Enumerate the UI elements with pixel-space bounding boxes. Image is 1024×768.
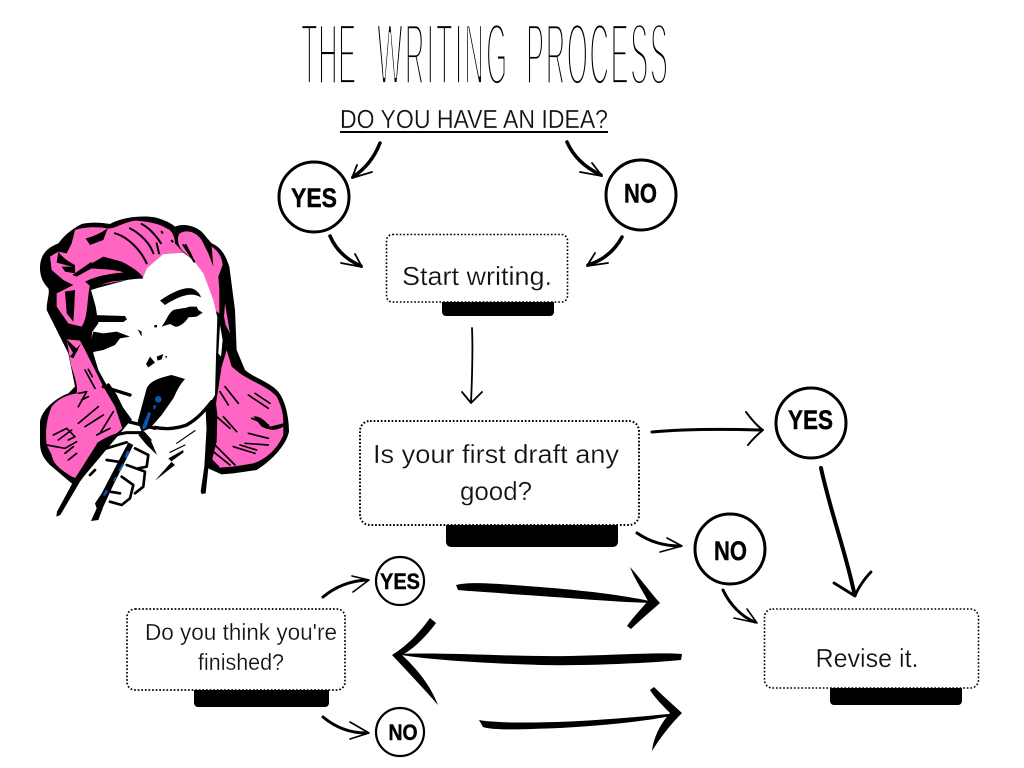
card: revise it: [764, 609, 978, 705]
arrow: idea to yes: [352, 143, 380, 178]
earring: [218, 325, 223, 357]
face: [91, 253, 217, 427]
circle: small yes: YES: [380, 569, 420, 594]
side and curl strands: [47, 369, 113, 460]
card: do you think you're finished: [127, 609, 345, 707]
right eye: [162, 307, 203, 327]
circle: yes: [279, 162, 349, 232]
card: revise it: Revise it.: [816, 643, 918, 673]
arrow: first draft to no: [637, 533, 682, 552]
circle: no right: [695, 514, 765, 584]
collar marks: [170, 431, 195, 452]
circle: yes right: YES: [788, 405, 833, 435]
big arrow: no to revise: [479, 687, 682, 751]
card: start writing: [386, 234, 568, 316]
circle: yes right: [776, 388, 846, 458]
strand lines: [115, 224, 194, 263]
arrow: start writing to first draft: [462, 328, 482, 403]
pen blue marks: [103, 451, 130, 496]
card: first draft: good?: [460, 476, 532, 506]
illustration: woman with pen: [40, 216, 289, 521]
circle: no right: NO: [714, 536, 747, 566]
question heading: DO YOU HAVE AN IDEA?: [340, 104, 608, 134]
big arrow: yes to revise: [456, 567, 660, 629]
arm line: [56, 442, 102, 517]
nose: [138, 325, 167, 367]
arrow: yes to revise: [821, 468, 871, 596]
jaw line: [103, 385, 212, 429]
curl blob: [253, 416, 283, 430]
card: first draft: [360, 421, 639, 547]
hair silhouette: [40, 216, 289, 485]
arrow: finished to yes: [323, 576, 369, 597]
card: do you think you're finished: Do you think you're: [145, 619, 337, 645]
circle: yes: YES: [291, 183, 337, 213]
left eyebrow: [92, 315, 127, 322]
upper hair strands: [57, 228, 143, 358]
right eyebrow: [160, 288, 201, 305]
mouth and pen: [138, 375, 185, 432]
circle: no: [606, 160, 676, 230]
left eye: [85, 332, 130, 353]
arrow: yes to start writing: [330, 236, 362, 267]
arrow: first draft to yes: [652, 412, 763, 445]
big arrow: revise back to finished: [392, 618, 682, 705]
arrow: idea to no: [567, 142, 602, 176]
circle: small yes: [376, 557, 424, 605]
card: start writing: Start writing.: [402, 261, 552, 291]
fingers: [90, 442, 148, 505]
title: PROCESS: [526, 5, 668, 103]
arrow: finished to no: [323, 717, 369, 739]
circle: small no: NO: [388, 720, 418, 745]
pink hair fills: [46, 221, 283, 478]
hand outline: [98, 433, 150, 444]
card: first draft: Is your first draft any: [373, 439, 619, 469]
title: THE: [301, 5, 356, 103]
card: do you think you're finished: finished?: [198, 649, 284, 675]
arrow: no to revise: [723, 590, 757, 623]
circle: no: NO: [624, 178, 657, 208]
arrow: no to start writing: [587, 237, 622, 266]
circle: small no: [376, 708, 424, 756]
right curl strands: [212, 387, 270, 467]
title: WRITING: [377, 5, 507, 103]
title: [301, 5, 668, 103]
neck line: [201, 400, 213, 494]
pen highlights: [142, 396, 162, 429]
pen in hand: [91, 442, 133, 521]
